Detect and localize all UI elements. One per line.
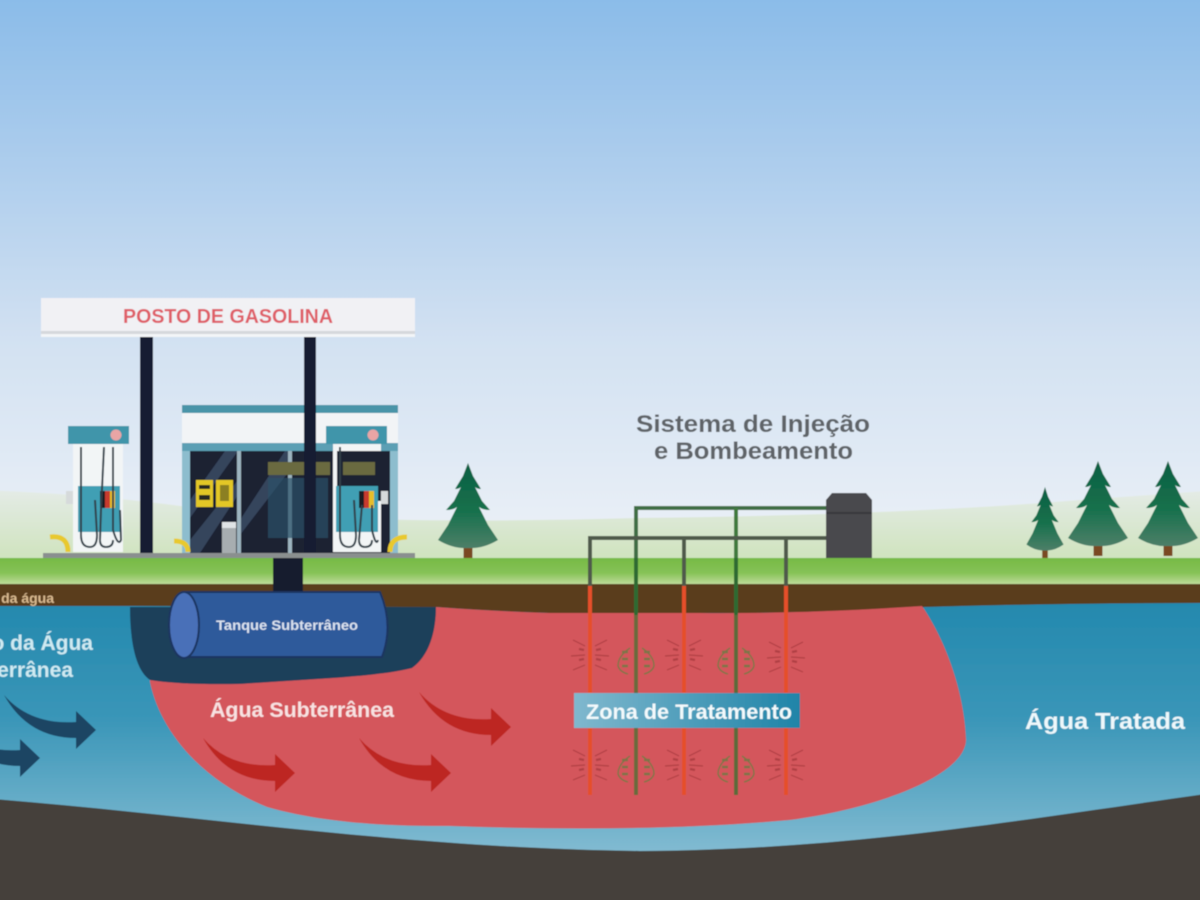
- sky: [0, 0, 1200, 530]
- title: injection and pumping system: Sistema de Injeção: [636, 411, 870, 438]
- pump unit: [826, 493, 872, 558]
- background hills: [0, 490, 1200, 560]
- label: groundwater: Água Subterrânea: [210, 699, 394, 722]
- title: injection and pumping system: e Bombeamento: [654, 438, 853, 465]
- grass strip: [0, 558, 1200, 585]
- fuel pump right: [326, 426, 388, 552]
- platform: [43, 553, 415, 558]
- gas station: [41, 298, 415, 558]
- soil layer: [0, 584, 1200, 618]
- label: treatment zone: [574, 693, 800, 728]
- label: treatment zone: Zona de Tratamento: [586, 701, 792, 724]
- canopy sign: [41, 298, 415, 337]
- store building: [182, 405, 398, 553]
- label: treated water: Água Tratada: [1025, 707, 1185, 734]
- label: groundwater flow: [0, 632, 93, 682]
- fuel pump left: [66, 426, 129, 552]
- dark contamination around tank: [130, 607, 436, 684]
- canopy sign: POSTO DE GASOLINA: [123, 306, 333, 328]
- feed pipe from station to tank: [273, 554, 303, 594]
- yellow bollards: [50, 537, 407, 552]
- bedrock: [0, 792, 1200, 900]
- underground tank: [169, 592, 388, 658]
- groundwater: [0, 603, 1200, 860]
- red flow arrows: [203, 692, 511, 792]
- canopy columns: [140, 337, 153, 553]
- blue flow arrows: [0, 695, 96, 777]
- injection and pumping wells: [571, 493, 872, 795]
- contamination plume: [150, 606, 966, 828]
- underground tank: Tanque Subterrâneo: [216, 617, 358, 633]
- title: injection and pumping system: [636, 411, 870, 465]
- treatment sparks: [571, 640, 805, 782]
- trees: [438, 461, 1198, 558]
